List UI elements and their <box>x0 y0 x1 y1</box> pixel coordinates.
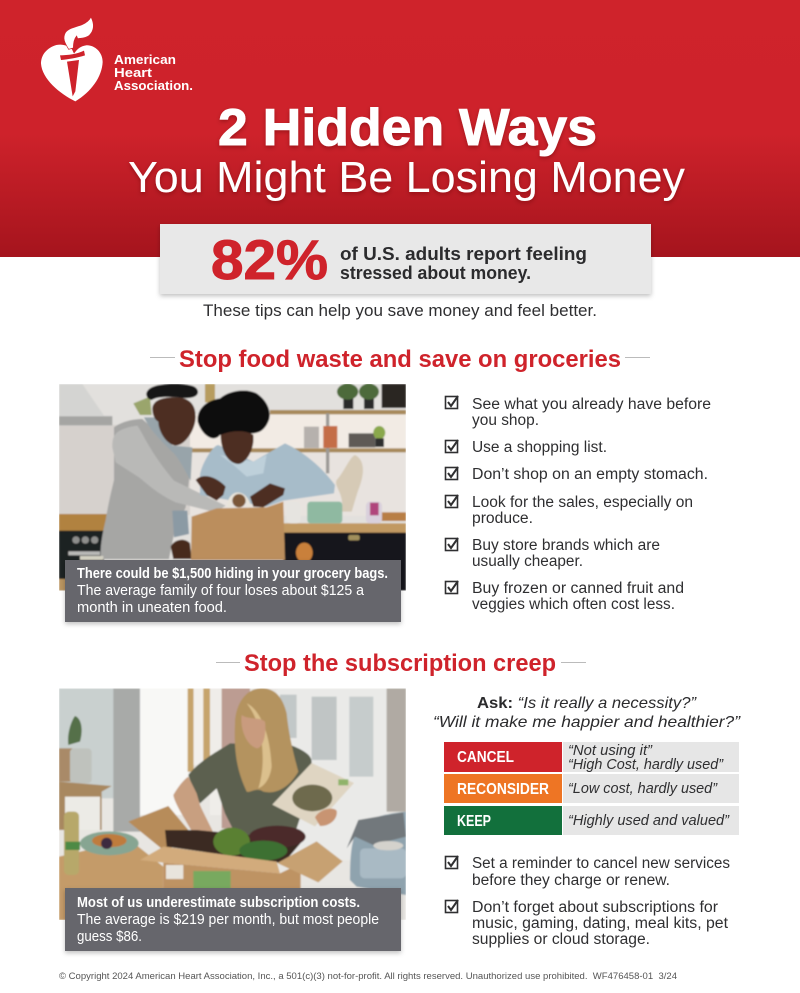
ask questions <box>433 695 741 731</box>
caption: grocery savings: month in uneaten food. <box>77 600 227 616</box>
tip: sales <box>446 494 693 527</box>
tip: reminder: Set a reminder to cancel new services <box>472 855 730 872</box>
tip: frozen or canned: veggies which often cost less. <box>472 596 675 613</box>
decision table <box>444 742 739 835</box>
tip: sales: produce. <box>472 510 533 527</box>
title <box>128 99 685 202</box>
box and greens <box>128 806 189 849</box>
tip: store brands: Buy store brands which are <box>472 537 660 554</box>
footer copyright: © Copyright 2024 American Heart Association, Inc., a 501(c)(3) not-for-profit. All rights reserved. Unauthorized use prohibited. WF476458-01 3/24 <box>59 971 677 981</box>
tip: frozen or canned <box>446 580 684 613</box>
row: reconsider: RECONSIDER <box>457 781 549 798</box>
tip: sales: Look for the sales, especially on <box>472 494 693 511</box>
heading: stop food waste: Stop food waste and save on groceries <box>179 346 621 373</box>
row: cancel: “Not using it” <box>568 743 653 759</box>
tip: shopping list: Use a shopping list. <box>472 439 607 456</box>
tip: store brands <box>446 537 660 570</box>
title: 2 Hidden Ways <box>218 99 597 157</box>
tip: store brands: usually cheaper. <box>472 553 583 570</box>
stat callout: 82%: 82% <box>211 228 328 291</box>
stat callout: 82%: stressed about money. <box>340 262 531 283</box>
red header band <box>0 0 800 257</box>
tip: reminder: before they charge or renew. <box>472 872 670 889</box>
caption: grocery savings: The average family of four loses about $125 a <box>77 583 365 599</box>
icon: heart and torch <box>41 17 103 101</box>
ask questions: Ask: “Is it really a necessity?” <box>477 695 697 712</box>
checklist: food tips <box>446 396 711 613</box>
logo: American Heart Association: Association. <box>114 79 193 93</box>
row: keep <box>444 806 739 835</box>
row: reconsider <box>444 774 739 803</box>
row: cancel: “High Cost, hardly used” <box>568 757 724 773</box>
heading: subscription creep: Stop the subscription creep <box>244 650 556 677</box>
woman <box>188 743 312 837</box>
armchair <box>350 812 406 895</box>
caption: grocery savings: There could be $1,500 hiding in your grocery bags. <box>77 566 388 582</box>
magazine <box>272 763 354 826</box>
logo: American Heart Association: American <box>114 53 176 67</box>
tip: see what you have: See what you already have before <box>472 396 711 413</box>
logo: American Heart Association: Heart <box>114 66 153 80</box>
tip: empty stomach: Don’t shop on an empty stomach. <box>472 466 708 483</box>
tip: forgotten subscriptions <box>446 899 729 948</box>
row: cancel <box>444 742 739 773</box>
logo: American Heart Association <box>41 17 193 101</box>
woman <box>200 443 335 507</box>
row: reconsider: “Low cost, hardly used” <box>568 781 718 797</box>
intro text: These tips can help you save money and feel better. <box>203 302 597 320</box>
stat callout: 82%: of U.S. adults report feeling <box>340 243 587 264</box>
stat callout: 82% <box>160 224 651 294</box>
row: cancel: CANCEL <box>457 749 514 766</box>
caption: subscription costs: guess $86. <box>77 929 142 945</box>
photo: couple unpacking a grocery bag <box>59 384 406 591</box>
tip: see what you have <box>446 396 711 429</box>
caption: subscription costs <box>65 888 401 951</box>
tip: forgotten subscriptions: Don’t forget about subscriptions for <box>472 899 718 916</box>
tip: see what you have: you shop. <box>472 412 539 429</box>
row: keep: “Highly used and valued” <box>568 813 730 829</box>
tip: reminder <box>446 855 730 889</box>
man <box>101 419 192 559</box>
photo: woman unpacking a meal kit box <box>59 688 406 920</box>
tip: frozen or canned: Buy frozen or canned fruit and <box>472 580 684 597</box>
tip: forgotten subscriptions: music, gaming, dating, meal kits, pet <box>472 915 729 932</box>
checklist: subscription tips <box>446 855 730 948</box>
caption: subscription costs: The average is $219 per month, but most people <box>77 912 379 928</box>
caption: subscription costs: Most of us underestimate subscription costs. <box>77 895 360 911</box>
ask questions: “Will it make me happier and healthier?” <box>433 714 741 731</box>
title: You Might Be Losing Money <box>128 153 685 202</box>
tip: forgotten subscriptions: supplies or cloud storage. <box>472 931 650 948</box>
row: keep: KEEP <box>457 813 491 830</box>
caption: grocery savings <box>65 560 401 622</box>
